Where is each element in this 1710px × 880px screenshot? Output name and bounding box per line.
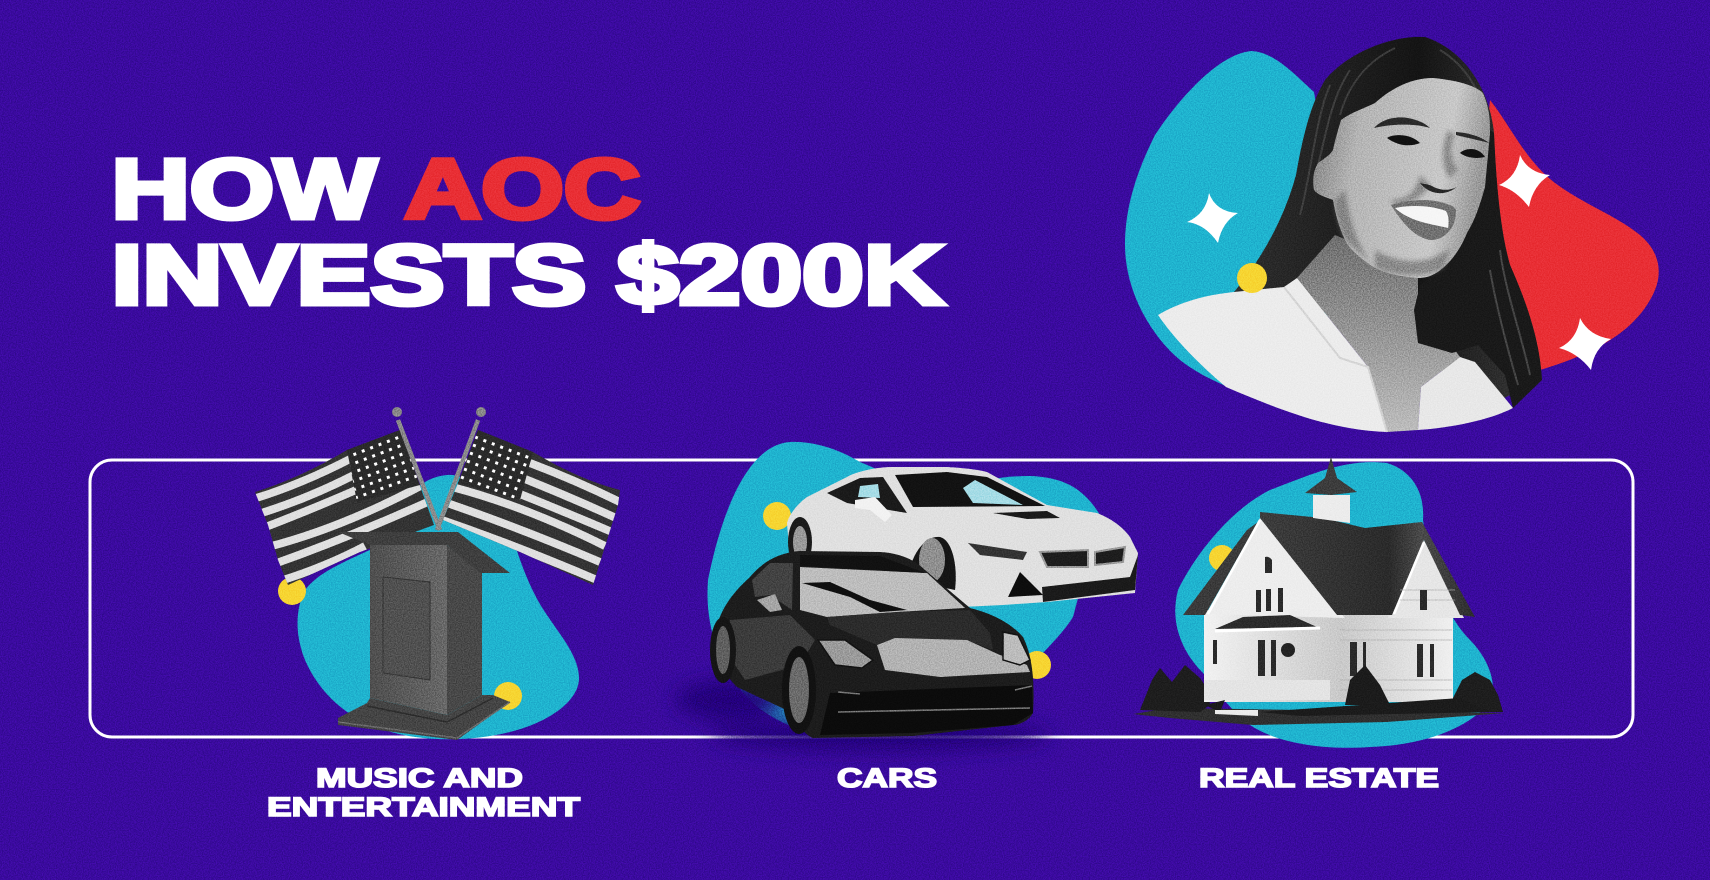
yellow dot — [1237, 263, 1267, 293]
left flag — [250, 430, 434, 585]
sparkle bottom — [1559, 318, 1611, 370]
sparkle right — [1499, 155, 1550, 207]
teal blob — [298, 475, 579, 739]
yellow dot right — [494, 682, 522, 710]
label: music and entertainment: MUSIC AND — [316, 763, 523, 793]
sparkle left — [1187, 193, 1238, 243]
teal blob — [1175, 462, 1493, 748]
ground — [1133, 708, 1505, 725]
house — [1133, 457, 1505, 725]
panel: real estate — [1133, 457, 1505, 748]
yellow dot left — [278, 577, 306, 605]
left and right bushes — [1140, 665, 1503, 712]
teal blob — [707, 442, 1100, 730]
heading line: INVESTS $200K: INVESTS $200K — [112, 228, 944, 322]
label: music and entertainment — [267, 763, 581, 822]
label: real estate: REAL ESTATE — [1199, 763, 1439, 793]
siding lines — [1340, 590, 1455, 690]
heading word: AOC: AOC — [404, 142, 640, 236]
label: music and entertainment: ENTERTAINMENT — [267, 792, 581, 822]
panel: cars — [675, 442, 1138, 751]
white car — [787, 467, 1138, 610]
red blob behind portrait — [1470, 100, 1659, 370]
yellow dot left — [763, 502, 791, 530]
portrait group — [1125, 37, 1659, 432]
black car — [710, 551, 1034, 738]
right flag — [442, 430, 622, 585]
face shading — [1335, 130, 1458, 275]
portrait of AOC — [1158, 37, 1542, 432]
heading word: HOW: HOW — [112, 142, 377, 236]
title — [112, 142, 944, 322]
teal blob behind portrait — [1125, 51, 1350, 388]
flag poles — [392, 407, 486, 530]
car shadow — [675, 680, 1050, 751]
yellow dot — [1209, 545, 1235, 571]
panel: music and entertainment — [250, 407, 622, 740]
label: cars: CARS — [837, 763, 937, 793]
front steps — [1215, 710, 1258, 716]
yellow dot right — [1023, 651, 1051, 679]
podium — [338, 532, 510, 740]
front bushes — [1205, 665, 1490, 716]
rounded frame — [90, 460, 1633, 737]
